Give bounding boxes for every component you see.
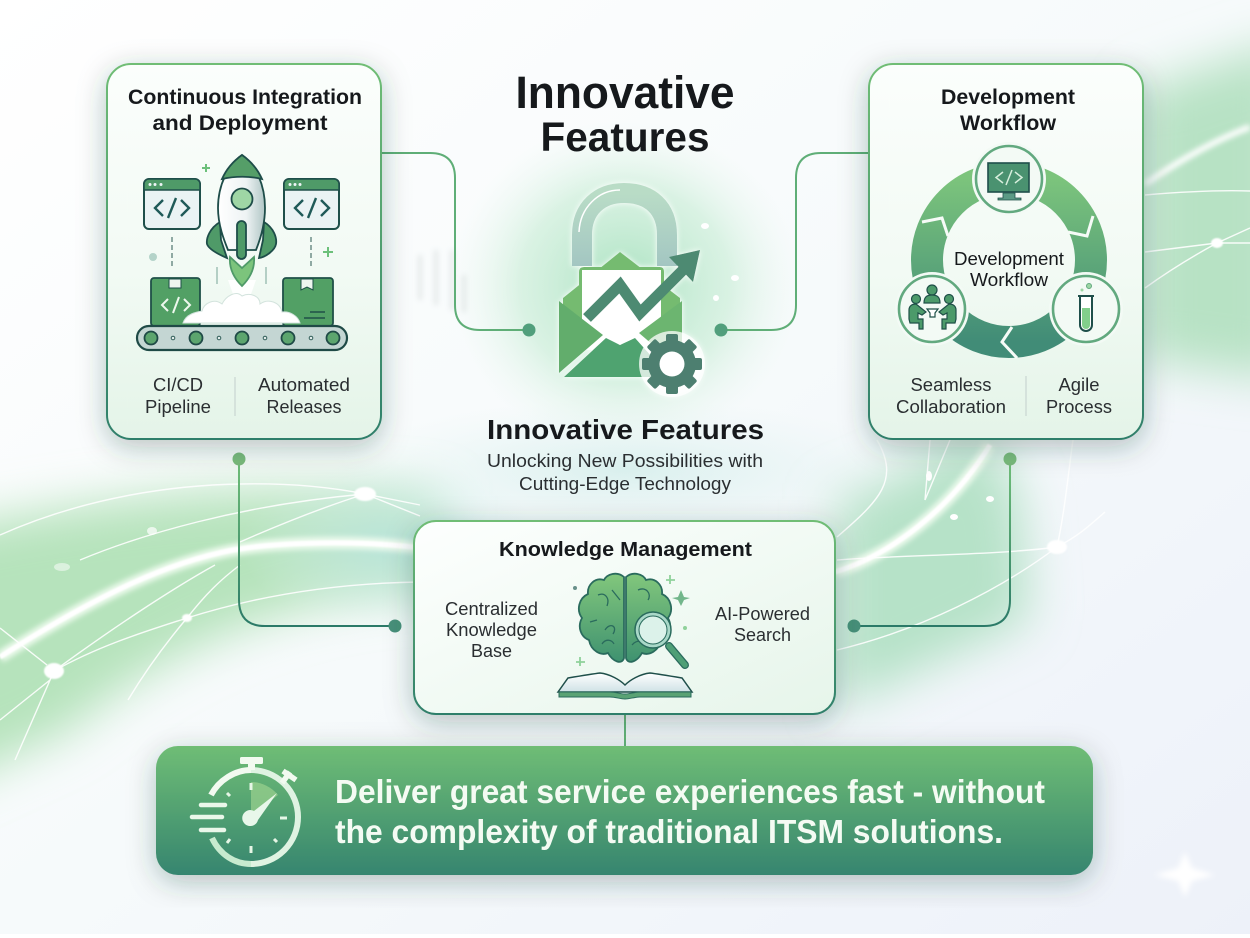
text: centralized knowledge base: Centralized — [445, 599, 538, 619]
icon: right package — [283, 278, 333, 326]
icon: monitor circle — [972, 142, 1046, 216]
text: agile process: Agile — [1058, 375, 1100, 395]
heading: continuous integration: and Deployment — [152, 112, 328, 135]
text: banner message: Deliver great service experiences fast - without — [335, 773, 1045, 810]
banner — [156, 746, 1093, 875]
connector lines — [232, 153, 1016, 746]
text: seamless collaboration: Seamless — [910, 375, 992, 395]
text: automated releases: Releases — [266, 397, 342, 417]
icon: brain with magnifier — [573, 574, 690, 666]
text: subtitle — [487, 451, 763, 494]
heading: development workflow: Development — [941, 86, 1075, 109]
icon: open book — [558, 673, 692, 699]
text: agile process — [1046, 375, 1112, 417]
text: ring center label — [954, 249, 1064, 290]
panel: continuous integration and deployment — [107, 64, 381, 439]
icon: rocket exhaust cloud — [183, 280, 300, 323]
text: ring center label: Workflow — [970, 270, 1049, 290]
text: banner message: the complexity of traditional ITSM solutions. — [335, 813, 1003, 850]
heading: knowledge management: Knowledge Management — [499, 539, 752, 561]
heading: continuous integration — [128, 86, 362, 135]
text: seamless collaboration — [896, 375, 1006, 417]
text: agile process: Process — [1046, 397, 1112, 417]
icon: conveyor belt — [137, 326, 347, 350]
text: subtitle: Unlocking New Possibilities with — [487, 451, 763, 471]
icon: right code window — [284, 179, 339, 229]
text: AI-powered search: AI-Powered — [715, 604, 810, 624]
heading: continuous integration: Continuous Integration — [128, 86, 362, 109]
heading: development workflow — [941, 86, 1075, 135]
text: centralized knowledge base — [445, 599, 538, 661]
icon: left code window — [144, 179, 200, 229]
icon: left package — [151, 278, 200, 326]
panel: development workflow — [869, 64, 1143, 439]
icon: team collaboration circle — [895, 272, 969, 346]
icon: stopwatch — [192, 757, 298, 864]
heading: innovative features: Innovative Features — [487, 414, 764, 445]
sparkles around central icon — [701, 223, 739, 301]
text: CI/CD pipeline: Pipeline — [145, 397, 211, 417]
title: Features — [540, 114, 710, 160]
panel: knowledge management — [414, 521, 835, 714]
text: AI-powered search — [715, 604, 810, 645]
text: automated releases — [258, 375, 350, 417]
text: CI/CD pipeline — [145, 375, 211, 417]
chart: workflow cycle ring — [922, 178, 1093, 358]
icon: rocket — [207, 155, 276, 286]
text: banner message — [335, 773, 1045, 850]
title — [516, 67, 734, 160]
text: subtitle: Cutting-Edge Technology — [519, 474, 731, 494]
text: CI/CD pipeline: CI/CD — [153, 375, 203, 395]
icon: test tube circle — [1049, 272, 1123, 346]
text: ring center label: Development — [954, 249, 1064, 269]
text: AI-powered search: Search — [734, 625, 791, 645]
icon: lock, envelope, growth arrow and gear — [559, 190, 705, 397]
text: centralized knowledge base: Knowledge — [446, 620, 537, 640]
heading: development workflow: Workflow — [960, 112, 1057, 135]
text: automated releases: Automated — [258, 375, 350, 395]
title: Innovative — [516, 67, 734, 118]
text: seamless collaboration: Collaboration — [896, 397, 1006, 417]
text: centralized knowledge base: Base — [471, 641, 512, 661]
